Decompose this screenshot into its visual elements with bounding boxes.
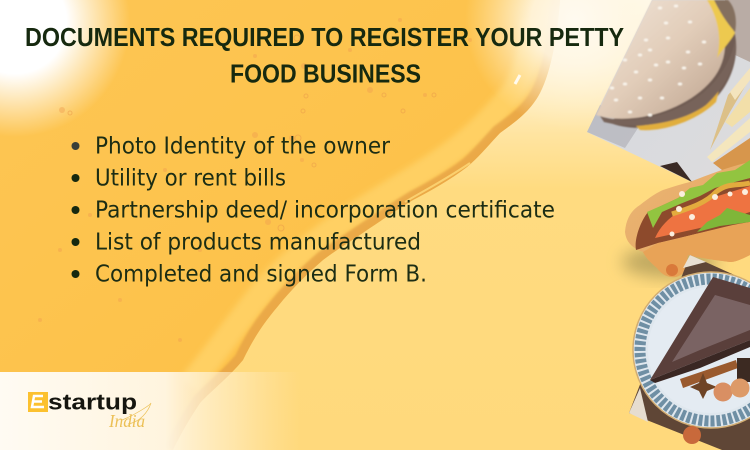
document bullet list <box>72 134 555 288</box>
logo: Estartup India: India <box>108 411 145 431</box>
icon: E mark <box>28 392 48 412</box>
burger <box>596 0 736 130</box>
logo: Estartup India <box>28 390 151 431</box>
photo: hot dog <box>622 160 750 278</box>
photo: cake on plate <box>629 255 750 450</box>
item: utility bills: Utility or rent bills <box>95 166 286 192</box>
bottom-left band <box>0 372 300 450</box>
title <box>25 22 624 88</box>
item: form B: Completed and signed Form B. <box>95 262 427 288</box>
logo: Estartup India: startup <box>48 390 137 414</box>
item: list of products: List of products manufactured <box>95 230 421 256</box>
cinnamon, star anise and hazelnuts <box>680 358 750 402</box>
honey bubbles <box>38 18 472 342</box>
item: photo identity: Photo Identity of the owner <box>95 134 391 160</box>
cake slice <box>650 277 750 380</box>
item: partnership deed: Partnership deed/ incorporation certificate <box>95 198 555 224</box>
title: FOOD BUSINESS <box>230 58 421 88</box>
photo: burger and fries <box>587 0 750 215</box>
fries <box>707 68 750 172</box>
title: DOCUMENTS REQUIRED TO REGISTER YOUR PETTY <box>25 22 624 52</box>
plate <box>633 272 750 428</box>
